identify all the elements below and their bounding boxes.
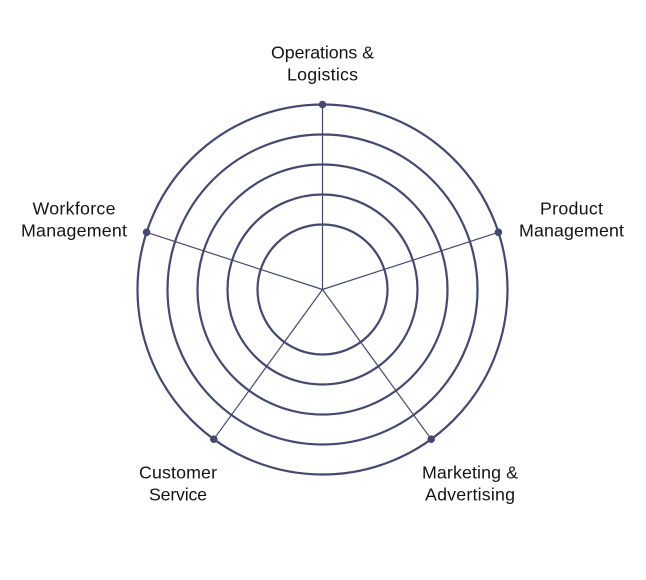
label: Product Management: Product bbox=[540, 198, 603, 218]
label: Customer Service: Service bbox=[149, 484, 207, 504]
concentric rings bbox=[138, 104, 508, 474]
label: Customer Service bbox=[139, 462, 217, 504]
label: Customer Service: Customer bbox=[139, 462, 217, 482]
spokes bbox=[147, 104, 498, 439]
label: Workforce Management: Workforce bbox=[32, 198, 116, 218]
label: Marketing & Advertising bbox=[422, 462, 518, 504]
label: Operations & Logistics: Operations & bbox=[271, 42, 374, 62]
axis end dots bbox=[143, 101, 502, 443]
label: Marketing & Advertising: Advertising bbox=[425, 484, 515, 504]
label: Product Management bbox=[519, 198, 624, 240]
label: Workforce Management bbox=[21, 198, 127, 240]
label: Operations & Logistics: Logistics bbox=[287, 64, 358, 84]
label: Workforce Management: Management bbox=[21, 220, 127, 240]
label: Marketing & Advertising: Marketing & bbox=[422, 462, 518, 482]
label: Product Management: Management bbox=[519, 220, 624, 240]
label: Operations & Logistics bbox=[271, 42, 374, 84]
